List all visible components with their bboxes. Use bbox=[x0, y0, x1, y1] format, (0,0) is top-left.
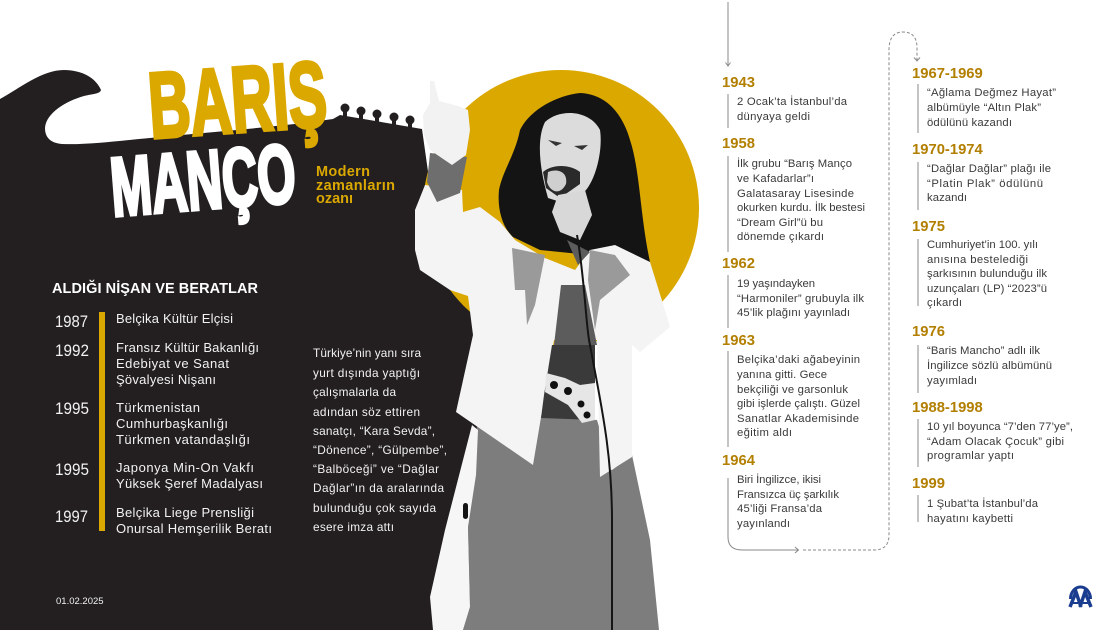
white jacket bbox=[415, 185, 670, 477]
list: award years: 1997 bbox=[55, 508, 88, 526]
text block: career paragraph: Dağlar”ın da aralarında bbox=[313, 481, 444, 495]
entry: 1970-1974: “Platin Plak” ödülünü bbox=[927, 178, 1043, 190]
entry: 1976: yayımladı bbox=[927, 375, 977, 387]
microphone cable bbox=[577, 235, 612, 630]
entry: 1970-1974: 1970-1974 bbox=[912, 142, 984, 158]
entry: 1970-1974 bbox=[912, 142, 1051, 210]
entry: 1963 bbox=[722, 333, 860, 447]
entry: 1964: 45’liği Fransa’da bbox=[737, 503, 823, 515]
subtitle: ozanı bbox=[316, 191, 353, 207]
entry: 1967-1969 bbox=[912, 66, 1056, 133]
entry: 1970-1974: kazandı bbox=[927, 192, 967, 204]
title: Manço: MANÇO bbox=[107, 127, 299, 234]
bar: awards timeline bbox=[99, 312, 105, 531]
date: 01.02.2025 bbox=[56, 596, 104, 607]
trousers bbox=[463, 415, 659, 630]
entry: 1976: 1976 bbox=[912, 324, 945, 340]
entry: 1962: “Harmoniler” grubuyla ilk bbox=[737, 293, 864, 305]
entry: 1943: 1943 bbox=[722, 75, 755, 91]
entry: 1976: İngilizce sözlü albümünü bbox=[927, 359, 1052, 372]
entry: 1962 bbox=[722, 256, 864, 328]
subtitle bbox=[316, 164, 395, 207]
list: award names: Belçika Liege Prensliği bbox=[116, 505, 254, 520]
entry: 1958: İlk grubu “Barış Manço bbox=[737, 157, 852, 170]
entry: 1964 bbox=[722, 453, 839, 530]
hand bbox=[423, 81, 470, 165]
entry: 1958 bbox=[722, 136, 865, 252]
entry: 1975: şarkısının bulunduğu ilk bbox=[927, 268, 1047, 280]
entry: 1958: okurken kurdu. İlk bestesi bbox=[737, 201, 865, 214]
subtitle: Modern bbox=[316, 164, 370, 180]
text block: career paragraph: sanatçı, “Kara Sevda”, bbox=[313, 424, 435, 438]
photo: singer figure bbox=[415, 81, 670, 630]
entry: 1963: gibi işlerde çalıştı. Güzel bbox=[737, 398, 860, 410]
icon: AA logo bbox=[1070, 587, 1091, 607]
text block: career paragraph: yurt dışında yaptığı bbox=[313, 366, 420, 380]
heading: awards: ALDIĞI NİŞAN VE BERATLAR bbox=[52, 279, 259, 297]
hair bbox=[499, 93, 650, 262]
entry: 1943: 2 Ocak’ta İstanbul’da bbox=[737, 95, 848, 108]
face bbox=[540, 113, 601, 205]
arrow: timeline start bbox=[726, 2, 730, 66]
entry: 1967-1969: albümüyle “Altın Plak” bbox=[927, 102, 1041, 114]
white coat tail bbox=[430, 425, 478, 630]
list: award names: Türkmen vatandaşlığı bbox=[116, 432, 250, 447]
entry: 1964: Fransızca üç şarkılık bbox=[737, 489, 839, 501]
eyes bbox=[548, 140, 588, 150]
entry: 1963: 1963 bbox=[722, 333, 755, 349]
belt bbox=[545, 373, 595, 423]
list: award names: Japonya Min-On Vakfı bbox=[116, 460, 254, 475]
text block: career paragraph: esere imza attı bbox=[313, 520, 394, 534]
jacket fringe shading bbox=[512, 248, 630, 330]
entry: 1975 bbox=[912, 219, 1047, 309]
entry: 1958: ve Kafadarlar”ı bbox=[737, 173, 814, 185]
list: award names: Edebiyat ve Sanat bbox=[116, 356, 229, 371]
entry: 1988-1998: 1988-1998 bbox=[912, 400, 983, 416]
microphone bbox=[547, 170, 566, 191]
entry: 1962: 1962 bbox=[722, 256, 755, 272]
entry: 1963: Sanatlar Akademisinde bbox=[737, 413, 859, 425]
text block: career paragraph: “Dönence”, “Gülpembe”, bbox=[313, 443, 447, 457]
entry: 1976: “Baris Mancho” adlı ilk bbox=[927, 345, 1040, 357]
text block: career paragraph: adından söz ettiren bbox=[313, 405, 420, 419]
entry: 1958: Galatasaray Lisesinde bbox=[737, 188, 854, 200]
entry: 1988-1998 bbox=[912, 400, 1073, 467]
list: award names: Türkmenistan bbox=[116, 400, 200, 415]
gray cuff bbox=[427, 153, 467, 202]
list: award years bbox=[55, 313, 89, 526]
moustache and mouth bbox=[543, 166, 580, 198]
list: award names: Yüksek Şeref Madalyası bbox=[116, 476, 263, 491]
entry: 1988-1998: “Adam Olacak Çocuk” gibi bbox=[927, 436, 1064, 448]
entry: 1975: uzunçaları (LP) “2023”ü bbox=[927, 283, 1047, 295]
entry: 1988-1998: programlar yaptı bbox=[927, 450, 1014, 462]
arrow: timeline connector bbox=[728, 32, 920, 553]
entry: 1963: yanına gitti. Gece bbox=[737, 369, 827, 381]
entry: 1963: bekçiliği ve garsonluk bbox=[737, 384, 848, 396]
text block: career paragraph: Türkiye’nin yanı sıra bbox=[313, 346, 421, 360]
entry: 1970-1974: “Dağlar Dağlar” plağı ile bbox=[927, 163, 1051, 175]
entry: 1964: Biri İngilizce, ikisi bbox=[737, 473, 821, 486]
list: award names: Şövalyesi Nişanı bbox=[116, 372, 216, 387]
entry: 1999: hayatını kaybetti bbox=[927, 513, 1013, 525]
entry: 1975: 1975 bbox=[912, 219, 945, 235]
entry: 1962: 19 yaşındayken bbox=[737, 278, 815, 290]
entry: 1964: yayınlandı bbox=[737, 518, 790, 530]
subtitle: zamanların bbox=[316, 178, 395, 194]
entry: 1976 bbox=[912, 324, 1052, 393]
list: award names: Onursal Hemşerilik Beratı bbox=[116, 521, 272, 536]
entry: 1958: dönemde çıkardı bbox=[737, 231, 824, 243]
list: award names: Fransız Kültür Bakanlığı bbox=[116, 340, 259, 355]
timeline column 2 bbox=[912, 66, 1073, 525]
list: award years: 1987 bbox=[55, 313, 88, 331]
entry: 1943 bbox=[722, 75, 848, 128]
tail button bbox=[463, 503, 468, 519]
list: award years: 1995 bbox=[55, 461, 89, 479]
shirt bbox=[554, 240, 597, 345]
entry: 1964: 1964 bbox=[722, 453, 756, 469]
title: Barış: BARIŞ bbox=[145, 42, 330, 158]
entry: 1975: anısına bestelediği bbox=[927, 254, 1028, 266]
text block: career paragraph: çalışmalarla da bbox=[313, 385, 396, 399]
list: award names: Cumhurbaşkanlığı bbox=[116, 416, 228, 431]
panel: dark guitar-shaped background bbox=[0, 70, 590, 630]
timeline column 1 bbox=[722, 75, 865, 530]
entry: 1967-1969: “Ağlama Değmez Hayat” bbox=[927, 87, 1056, 99]
text block: career paragraph: “Balböceği” ve “Dağlar bbox=[313, 462, 439, 476]
entry: 1963: eğitim aldı bbox=[737, 427, 792, 439]
entry: 1999 bbox=[912, 476, 1039, 525]
list: award years: 1995 bbox=[55, 400, 89, 418]
entry: 1999: 1999 bbox=[912, 476, 945, 492]
entry: 1975: çıkardı bbox=[927, 297, 962, 309]
list: award names: Belçika Kültür Elçisi bbox=[116, 311, 233, 326]
entry: 1975: Cumhuriyet’in 100. yılı bbox=[927, 239, 1038, 251]
entry: 1958: 1958 bbox=[722, 136, 755, 152]
entry: 1999: 1 Şubat’ta İstanbul’da bbox=[927, 497, 1039, 510]
mic hand bbox=[552, 190, 592, 240]
list: award years: 1992 bbox=[55, 342, 89, 360]
entry: 1967-1969: 1967-1969 bbox=[912, 66, 983, 82]
list: award names bbox=[116, 311, 272, 536]
text block: career paragraph bbox=[313, 346, 447, 534]
entry: 1967-1969: ödülünü kazandı bbox=[927, 117, 1012, 129]
text block: career paragraph: bulunduğu çok sayıda bbox=[313, 501, 436, 515]
entry: 1962: 45’lik plağını yayınladı bbox=[737, 307, 850, 319]
entry: 1958: “Dream Girl”ü bu bbox=[737, 217, 823, 229]
entry: 1963: Belçika’daki ağabeyinin bbox=[737, 354, 860, 366]
yellow circle bbox=[423, 70, 699, 346]
entry: 1943: dünyaya geldi bbox=[737, 111, 810, 123]
waistband bbox=[541, 345, 595, 420]
entry: 1988-1998: 10 yıl boyunca “7’den 77’ye”, bbox=[927, 421, 1073, 433]
